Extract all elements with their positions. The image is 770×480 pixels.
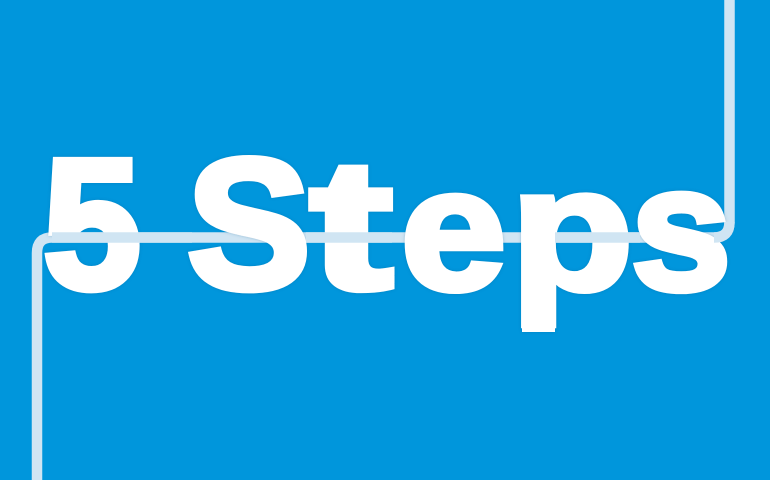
- connector line segments woven over title: [52, 222, 730, 238]
- title: 5 Steps: t: [310, 122, 393, 328]
- title: 5 Steps: e: [401, 133, 506, 326]
- title: 5 Steps: S: [187, 121, 311, 328]
- title: 5 Steps: s: [631, 130, 731, 327]
- p descender extension: [522, 290, 555, 332]
- title: 5 Steps: p: [511, 133, 633, 326]
- title: 5 Steps: 5: [43, 121, 141, 328]
- title: 5 Steps: [43, 121, 731, 332]
